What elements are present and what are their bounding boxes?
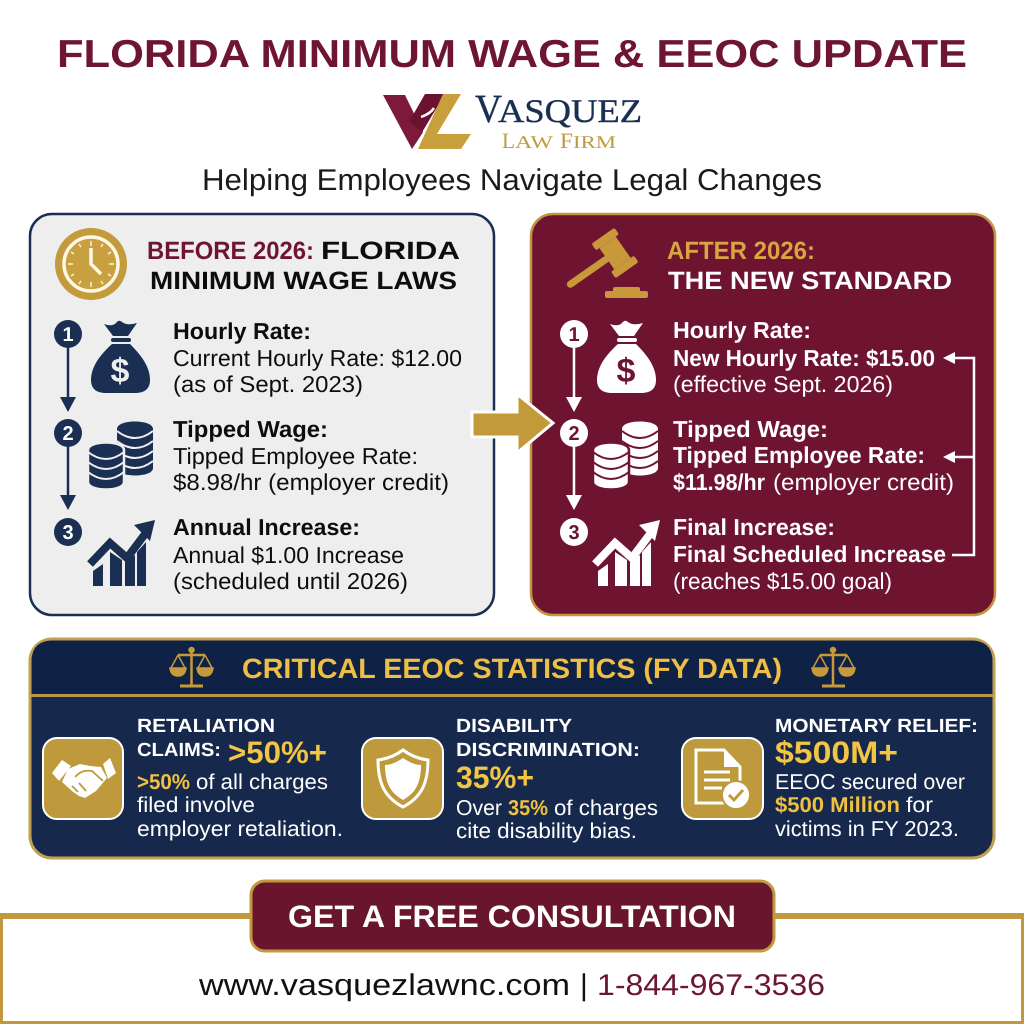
logo: Vasquez Law Firm: V [475,86,502,131]
icon: money bag: $ [617,352,636,390]
step numbers and arrows [54,320,82,546]
icon: money bag [597,321,656,393]
logo: Vasquez Law Firm: F [560,128,573,153]
text: hourly rate [673,317,935,397]
heading: after 2026: THE NEW STANDARD [668,267,952,295]
step numbers and arrows: 2 [568,423,580,445]
stat: retaliation claims: >50%+ [228,735,327,770]
text: annual increase: (scheduled until 2026) [173,568,408,594]
stat: disability discrimination: 35%+ [456,760,534,795]
stat: retaliation claims: RETALIATION [137,716,275,737]
stat: monetary relief: $500 Million [775,793,900,817]
text: final increase: Final Increase: [673,514,835,540]
text: final increase: Final Scheduled Increase [673,541,946,567]
logo: Vasquez Law Firm [383,86,642,153]
step numbers and arrows: 1 [62,324,74,346]
text: annual increase: Annual $1.00 Increase [173,542,404,568]
stat: monetary relief [775,716,978,841]
title: FLORIDA MINIMUM WAGE & EEOC UPDATE [57,33,967,76]
text: final increase [673,514,946,594]
arrow: before to after [472,394,553,453]
text: hourly rate: Hourly Rate: [173,318,311,344]
logo: Vasquez Law Firm: IRM [573,132,616,152]
panel: after 2026 [531,214,995,615]
text: hourly rate [173,318,462,397]
text: final increase: (reaches $15.00 goal) [673,568,892,594]
icon: money bag: $ [111,352,130,390]
heading: before 2026: MINIMUM WAGE LAWS [150,267,457,295]
stat: disability discrimination [456,716,658,843]
panel: EEOC statistics [30,639,994,858]
bracket arrows [943,352,974,555]
text: tipped wage: Tipped Employee Rate: [173,443,418,469]
heading: after 2026: AFTER 2026: [667,237,815,265]
contact line [198,969,825,1002]
stat: monetary relief: victims in FY 2023. [775,817,959,841]
stat: disability discrimination: 35% [508,796,548,820]
heading: critical EEOC statistics: CRITICAL EEOC STATISTICS (FY DATA) [242,653,782,684]
panel: before 2026 [30,214,494,615]
stat: retaliation claims: CLAIMS: [137,740,221,761]
text: annual increase: Annual Increase: [173,514,360,540]
heading: after 2026 [667,237,952,295]
contact line: | [580,969,588,1002]
text: tipped wage: Tipped Employee Rate: [673,442,925,468]
text: hourly rate: New Hourly Rate: $15.00 [673,345,935,371]
stat: retaliation claims: filed involve [137,793,255,817]
stat: retaliation claims [137,716,343,841]
icon: handshake [43,738,123,819]
text: tipped wage: $11.98/hr [673,469,765,495]
stat: retaliation claims: >50% [137,770,190,794]
icon: coins [88,422,153,490]
text: hourly rate: Hourly Rate: [673,317,811,343]
step numbers and arrows: 3 [62,522,74,544]
icon: scales right [812,648,855,686]
stat: monetary relief: EEOC secured over [775,770,965,794]
text: tipped wage: Tipped Wage: [173,416,328,442]
text: tipped wage: (employer credit) [773,469,954,495]
text: tipped wage: Tipped Wage: [673,416,828,442]
text: tipped wage [673,416,954,495]
subtitle: Helping Employees Navigate Legal Changes [202,164,822,197]
stat: monetary relief: MONETARY RELIEF: [775,716,978,737]
step numbers and arrows: 3 [568,522,580,544]
call to action button [251,881,774,951]
icon: clock [55,228,127,300]
text: hourly rate: Current Hourly Rate: $12.00 [173,345,462,371]
header band [32,640,992,694]
icon: document with check [682,738,763,819]
icon: scales left [170,648,213,686]
stat: disability discrimination: cite disability bias. [456,819,637,843]
step numbers and arrows: 2 [62,423,74,445]
icon: shield [362,738,443,819]
text: annual increase [173,514,408,594]
stat: disability discrimination: of charges [554,796,658,820]
call to action button: GET A FREE CONSULTATION [288,899,736,934]
step numbers and arrows: 1 [568,324,580,346]
stat: monetary relief: $500M+ [775,735,898,770]
stat: retaliation claims: of all charges [196,770,328,794]
text: hourly rate: (as of Sept. 2023) [173,371,363,397]
heading: before 2026: BEFORE 2026: [147,237,314,265]
contact line: www.vasquezlawnc.com [198,969,570,1002]
footer frame [0,916,1024,1024]
text: tipped wage [173,416,449,495]
text: tipped wage: $8.98/hr (employer credit) [173,469,449,495]
logo: Vasquez Law Firm: L [502,128,515,153]
heading: before 2026 [147,237,460,295]
icon: rising chart [595,520,660,586]
icon: rising chart [90,520,155,586]
heading: before 2026: FLORIDA [321,237,460,265]
step numbers and arrows [560,320,588,546]
stat: disability discrimination: Over [456,796,502,820]
stat: disability discrimination: DISCRIMINATION: [456,740,640,761]
logo: Vasquez Law Firm: AW [515,132,553,152]
stat: retaliation claims: employer retaliation. [137,817,343,841]
text: hourly rate: (effective Sept. 2026) [673,371,893,397]
logo: Vasquez Law Firm: ASQUEZ [498,94,642,130]
contact line: 1-844-967-3536 [597,969,825,1002]
icon: gavel [555,228,648,303]
stat: monetary relief: for [906,793,933,817]
icon: coins [593,422,658,490]
stat: disability discrimination: DISABILITY [456,716,572,737]
icon: money bag [91,321,150,393]
